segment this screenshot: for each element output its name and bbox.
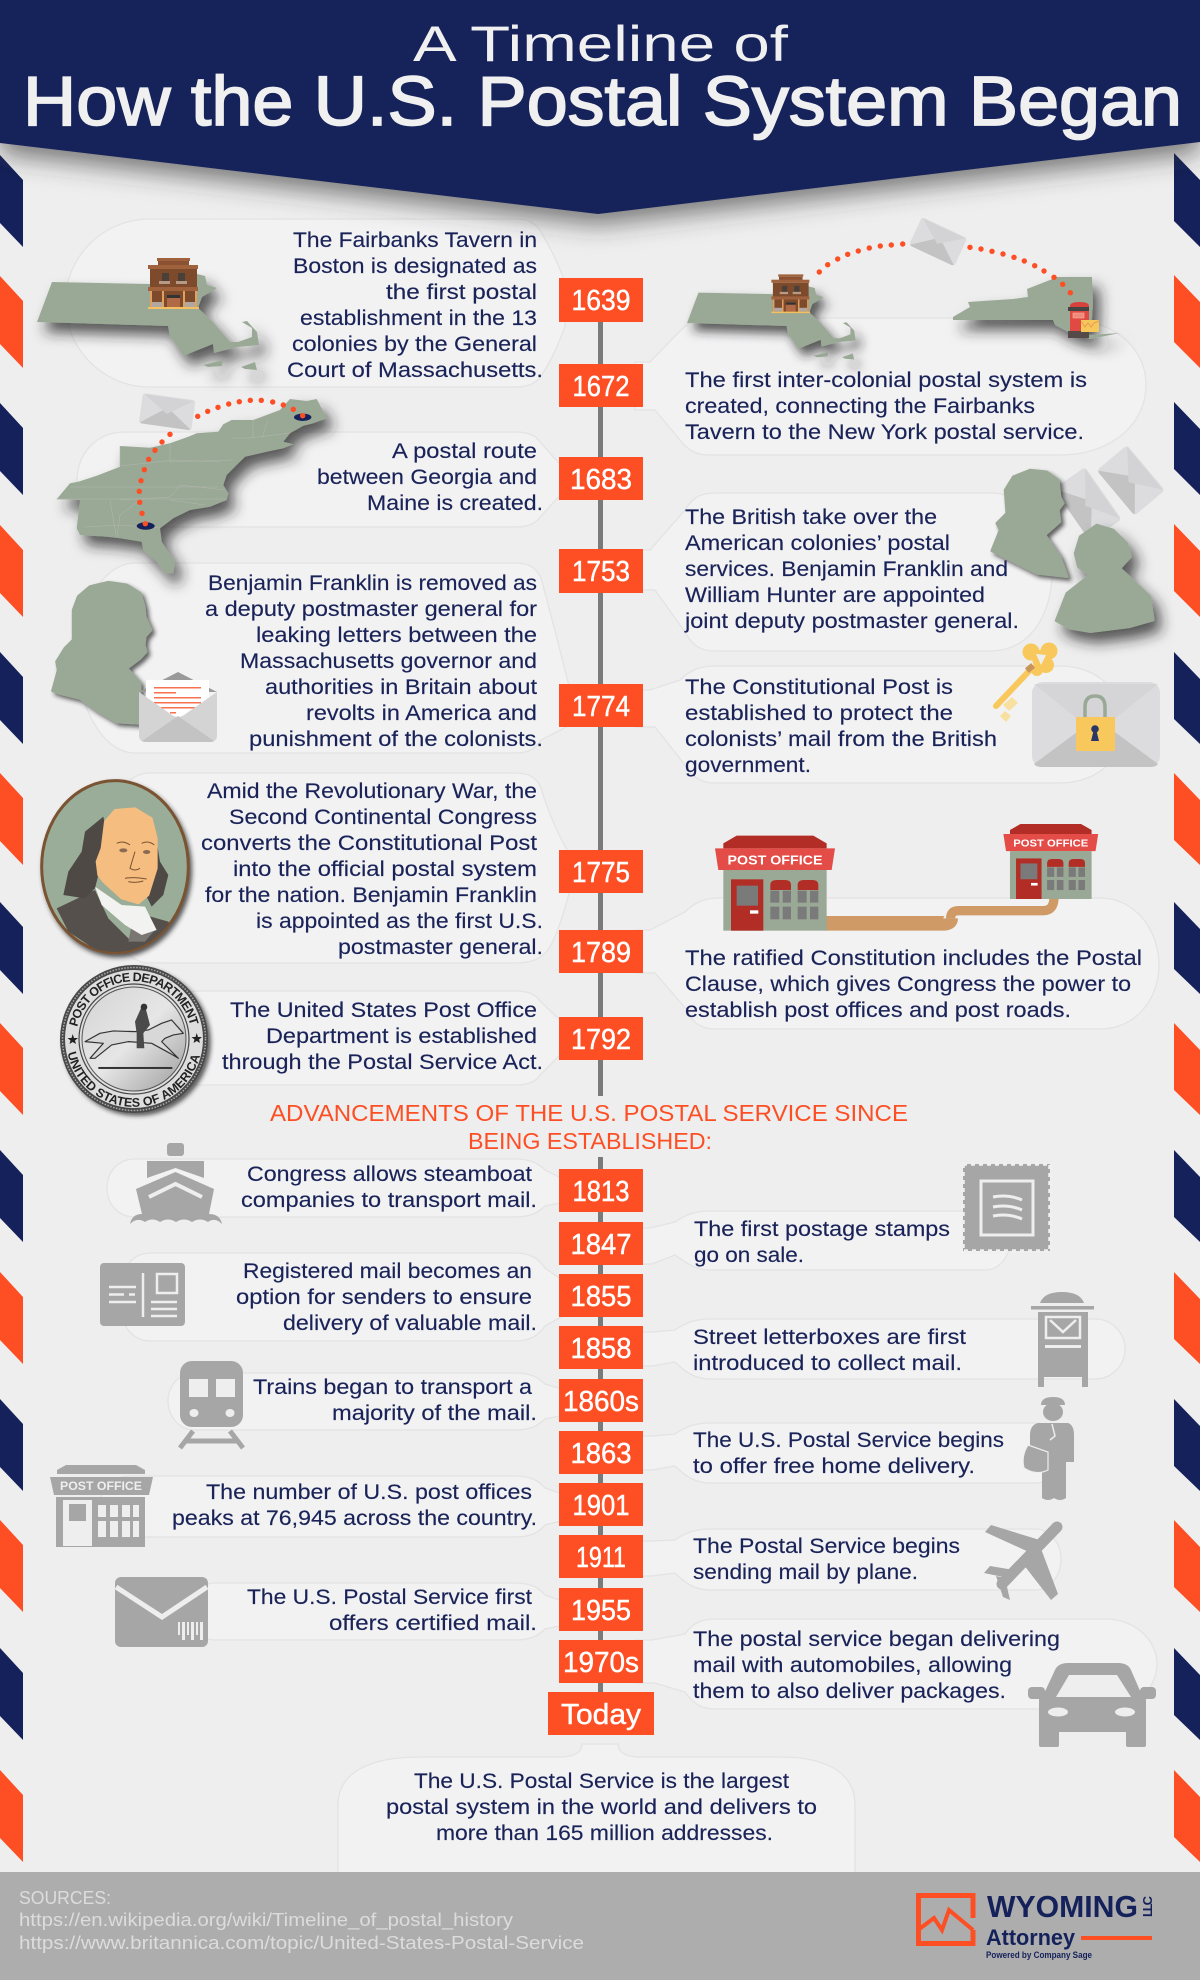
panel: 1775 Revolutionary War [42,773,570,963]
header banner [0,0,1200,214]
text: trains: majority of the mail. [332,1402,537,1425]
text: Post Office Department: The United States Post Office [230,999,537,1022]
timeline year markers: 1847 [570,1229,632,1261]
icon: Benjamin Franklin portrait [42,781,188,955]
text: airmail: sending mail by plane. [693,1561,918,1584]
timeline year markers: 1672 [572,371,630,403]
icon: certified envelope [115,1577,208,1647]
heading: advancements [270,1100,908,1154]
icon: gray post office: POST OFFICE [60,1479,142,1493]
panel: 1639 Fairbanks Tavern [37,219,565,387]
text: home delivery [693,1429,1004,1478]
panel: 1774 Constitutional Post [635,642,1160,783]
panel: 1753 Franklin removed [53,563,570,753]
icon: two envelopes [1054,445,1165,541]
text: Franklin removed: a deputy postmaster general for [205,598,537,621]
text: steamboat: Congress allows steamboat [247,1163,532,1186]
text: Constitutional Post: government. [685,754,811,777]
text: Revolutionary War: into the official postal system [233,858,537,881]
icon: key [996,642,1058,722]
icon: Franklin silhouette [53,582,151,723]
icon: New York map [953,277,1120,339]
timeline year markers: 1774 [572,691,630,723]
text: steamboat [241,1163,537,1212]
text: postal route [317,440,543,515]
text: Constitutional Post [685,676,997,777]
text: today: postal system in the world and delivers to [386,1796,817,1819]
icon: Post Office Department seal [60,964,214,1120]
icon: small post office: POST OFFICE [1013,839,1089,850]
text: Postal Clause: Clause, which gives Congress the power to [685,973,1131,996]
panel: 1858 letterboxes [635,1292,1125,1387]
icon: steamship [130,1143,222,1224]
text: Fairbanks Tavern: Court of Massachusetts. [287,359,543,382]
icon: postage stamp [963,1164,1050,1251]
icon: Massachusetts map with tavern [37,258,259,370]
icon: large post office [715,836,835,931]
sources: SOURCES: [19,1887,111,1908]
text: British takeover: American colonies’ postal [685,532,950,555]
text: British takeover: services. Benjamin Franklin and [685,558,1008,581]
icon: gray post office [50,1465,153,1547]
icon: mail carrier [1023,1397,1074,1500]
text: letterboxes: introduced to collect mail. [693,1352,962,1375]
panel: 1847 postage stamps [635,1164,1050,1270]
panel: 1970s automobiles [635,1619,1157,1747]
text: airmail: The Postal Service begins [693,1535,960,1558]
text: certified mail [247,1586,537,1635]
timeline year markers: 1955 [571,1595,631,1627]
text: Revolutionary War [201,780,543,959]
panel: 1911 airmail [635,1525,1061,1600]
text: Franklin removed: Massachusetts governor and [240,650,537,673]
timeline year markers: 1901 [572,1490,630,1522]
sources: https://en.wikipedia.org/wiki/Timeline_of_postal_history [19,1909,514,1931]
text: automobiles: mail with automobiles, allowing [693,1654,1012,1677]
logo: Wyoming LLC Attorney: Powered by Company Sage [986,1950,1092,1961]
text: Revolutionary War: postmaster general. [338,936,543,959]
text: British takeover [684,506,1019,633]
text: Postal Clause: The ratified Constitution includes the Postal [685,947,1142,970]
panel: 1863 home delivery [635,1397,1074,1500]
text: certified mail: offers certified mail. [329,1612,537,1635]
timeline year markers: 1858 [570,1333,632,1365]
text: inter-colonial system [685,369,1087,444]
text: Revolutionary War: for the nation. Benjamin Franklin [205,884,537,907]
footer [0,1872,1200,1980]
text: British takeover: The British take over the [685,506,937,529]
timeline year markers: 1683 [570,464,632,496]
text: postal route: A postal route [392,440,537,463]
text: post office peak: peaks at 76,945 across the country. [172,1507,537,1530]
text: Franklin removed: punishment of the colonists. [249,728,543,751]
text: automobiles [693,1628,1060,1703]
timeline year markers: 1639 [572,285,630,317]
text: registered mail: Registered mail becomes an [243,1260,532,1283]
icon: train [180,1361,243,1448]
text: Post Office Department: through the Postal Service Act. [222,1051,543,1074]
text: post office peak [172,1481,537,1530]
icon: car [1028,1663,1156,1747]
text: inter-colonial system: created, connecting the Fairbanks [685,395,1035,418]
icon: open envelope with letter [139,672,217,742]
title line 2: How the U.S. Postal System Began [23,62,1182,140]
text: Franklin removed: Benjamin Franklin is removed as [208,572,537,595]
heading: advancements: BEING ESTABLISHED: [468,1128,712,1154]
text: stamps [694,1218,950,1267]
timeline axis [598,320,603,1694]
timeline year markers [548,278,654,1735]
panel: 1753 British take over [635,445,1165,651]
panel: today [338,1744,855,1873]
text: Revolutionary War: Second Continental Congress [229,806,537,829]
text: Fairbanks Tavern: colonies by the General [292,333,537,356]
text: trains [253,1376,537,1425]
panel: 1792 Post Office Department [60,964,559,1120]
text: Revolutionary War: is appointed as the first U.S. [256,910,543,933]
timeline year markers: 1792 [571,1024,631,1056]
timeline year markers: Today [561,1699,642,1731]
icon: small post office [1003,824,1098,899]
panel: 1901 post office peak [50,1465,565,1547]
text: Constitutional Post: The Constitutional Post is [685,676,953,699]
text: stamps: go on sale. [694,1244,804,1267]
panel: 1789 Postal Clause [635,824,1159,1029]
text: Franklin removed: leaking letters between the [256,624,537,647]
text: postal route: Maine is created. [367,492,543,515]
icon: Post Office Department seal: POST OFFICE DEPARTMENT [69,972,199,1026]
panel: 1855 registered mail [100,1253,565,1341]
icon: red post box with envelope [1068,302,1099,338]
icon: street letterbox [1031,1292,1094,1387]
text: Postal Clause [685,947,1142,1022]
text: home delivery: The U.S. Postal Service begins [693,1429,1004,1452]
icon: dotted route with envelope and markers [137,393,311,530]
text: letterboxes: Street letterboxes are first [693,1326,966,1349]
text: Fairbanks Tavern: The Fairbanks Tavern in [293,229,537,252]
text: British takeover: William Hunter are appointed [685,584,985,607]
icon: registered mail card [100,1263,185,1326]
text: post office peak: The number of U.S. post offices [206,1481,532,1504]
title line 1: A Timeline of [413,16,788,72]
icon: Post Office Department seal: UNITED STATES OF AMERICA [68,1051,200,1107]
text: Franklin removed: authorities in Britain about [265,676,537,699]
text: letterboxes [693,1326,966,1375]
airmail stripes: left border [0,155,23,1862]
panel: 1813 steamboats [107,1143,565,1224]
text: Fairbanks Tavern: establishment in the 13 [300,307,537,330]
logo: Wyoming LLC Attorney: Attorney [986,1925,1076,1950]
panel: 1955 certified mail [115,1577,565,1647]
text: registered mail: delivery of valuable mail. [283,1312,537,1335]
icon: airplane [984,1525,1058,1600]
text: certified mail: The U.S. Postal Service first [247,1586,532,1609]
text: registered mail: option for senders to ensure [236,1286,532,1309]
text: stamps: The first postage stamps [694,1218,950,1241]
text: Fairbanks Tavern: the first postal [386,281,537,304]
text: British takeover: joint deputy postmaster general. [684,610,1019,633]
text: Franklin removed: revolts in America and [306,702,537,725]
text: Fairbanks Tavern: Boston is designated as [293,255,537,278]
icon: dotted route with envelope [817,217,1073,295]
logo: Wyoming LLC Attorney: LLC [1140,1895,1155,1917]
panel: 1672 inter-colonial postal system [635,217,1146,455]
text: today: more than 165 million addresses. [436,1822,773,1845]
text: Postal Clause: establish post offices and post roads. [685,999,1071,1022]
timeline year markers: 1863 [570,1438,632,1470]
text: automobiles: them to also deliver packages. [693,1680,1006,1703]
icon: Franklin and Hunter silhouettes [992,470,1153,632]
text: Constitutional Post: colonists’ mail from the British [685,728,997,751]
logo: Wyoming LLC Attorney [918,1889,1155,1961]
sources: https://www.britannica.com/topic/United-States-Postal-Service [19,1932,584,1953]
timeline year markers: 1789 [571,937,631,969]
timeline year markers: 1855 [570,1281,632,1313]
sources [19,1887,584,1953]
text: trains: Trains began to transport a [253,1376,532,1399]
panel: 1683 Georgia to Maine route [57,393,565,573]
text: steamboat: companies to transport mail. [241,1189,537,1212]
text: Revolutionary War: converts the Constitutional Post [201,832,537,855]
text: airmail [693,1535,960,1584]
text: Post Office Department [222,999,543,1074]
text: registered mail [236,1260,537,1335]
icon: envelope with padlock [1032,682,1160,767]
timeline year markers: 1775 [572,857,630,889]
timeline year markers: 1813 [572,1176,630,1208]
text: automobiles: The postal service began delivering [693,1628,1060,1651]
text: today [386,1770,817,1845]
icon: Massachusetts map with tavern, small [687,274,856,360]
text: Post Office Department: Department is established [266,1025,537,1048]
timeline year markers: 1860s [563,1386,639,1418]
text: Revolutionary War: Amid the Revolutionary War, the [207,780,537,803]
text: inter-colonial system: Tavern to the New York postal service. [685,421,1084,444]
text: Franklin removed [205,572,543,751]
icon: large post office: POST OFFICE [727,853,822,867]
timeline year markers: 1911 [576,1542,626,1574]
icon: eastern United States map [57,399,327,573]
text: inter-colonial system: The first inter-colonial postal system is [685,369,1087,392]
panel: 1860s trains [168,1361,565,1448]
icon: road between post offices [825,897,1054,923]
timeline year markers: 1970s [563,1647,639,1679]
logo: Wyoming LLC Attorney: WYOMING [987,1889,1138,1924]
text: postal route: between Georgia and [317,466,537,489]
airmail stripes: right border [1174,153,1200,1862]
text: today: The U.S. Postal Service is the largest [414,1770,789,1793]
text: home delivery: to offer free home delivery. [693,1455,975,1478]
timeline year markers: 1753 [572,556,630,588]
text: Fairbanks Tavern [287,229,543,382]
text: Constitutional Post: established to protect the [685,702,953,725]
heading: advancements: ADVANCEMENTS OF THE U.S. POSTAL SERVICE SINCE [270,1100,908,1126]
